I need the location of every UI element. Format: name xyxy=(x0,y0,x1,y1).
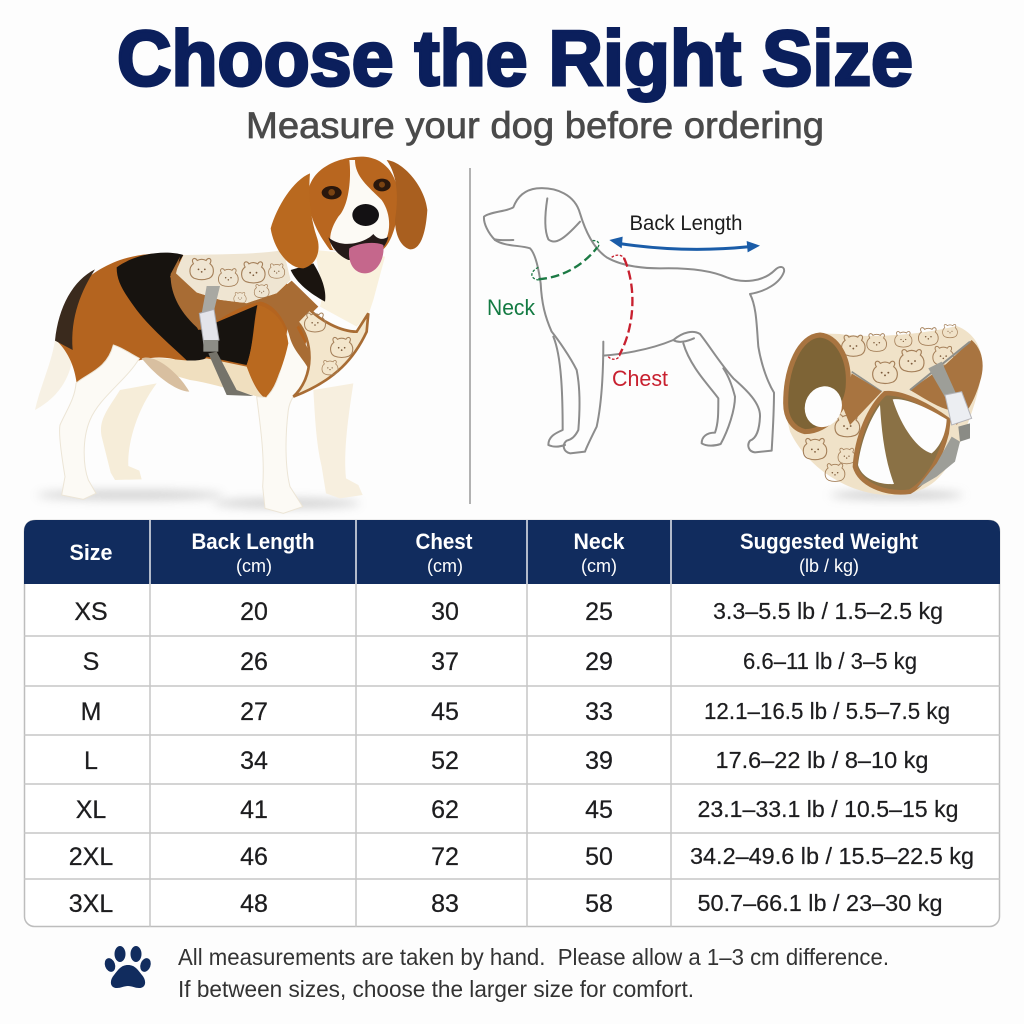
left opening xyxy=(786,335,848,432)
row 3XL: 50.7–66.1 lb / 23–30 kg xyxy=(698,890,942,916)
row S: S xyxy=(83,648,99,676)
row 3XL: 83 xyxy=(431,890,459,918)
row 3XL: 48 xyxy=(240,890,268,918)
harness brown flap xyxy=(171,257,318,382)
grey trim xyxy=(910,342,970,390)
row 2XL: 46 xyxy=(240,843,268,871)
row S: 26 xyxy=(240,648,268,676)
table header: Chest xyxy=(416,529,473,554)
row S: 6.6–11 lb / 3–5 kg xyxy=(743,648,917,674)
footnote: If between sizes, choose the larger size for comfort. xyxy=(178,976,694,1002)
size table xyxy=(24,520,1000,927)
eyes xyxy=(322,186,342,199)
harness back panel xyxy=(171,250,318,382)
table header: (cm) xyxy=(581,556,617,576)
table header: Back Length xyxy=(192,529,314,554)
row 3XL xyxy=(69,890,942,918)
back length arrow xyxy=(609,237,760,252)
grey strap and buckle xyxy=(199,286,253,396)
belly xyxy=(143,358,265,398)
ear right xyxy=(387,160,427,249)
row M xyxy=(81,698,950,726)
photo: beagle wearing harness xyxy=(35,157,427,513)
row L: 17.6–22 lb / 8–10 kg xyxy=(716,747,928,773)
row M: M xyxy=(81,698,101,726)
row L: L xyxy=(84,747,98,775)
row 3XL: 58 xyxy=(585,890,613,918)
black saddle xyxy=(117,253,257,368)
row L: 39 xyxy=(585,747,613,775)
chest white xyxy=(315,250,385,327)
label: back length: Back Length xyxy=(630,212,742,235)
diagram: dog outline with measurement lines xyxy=(484,188,784,453)
rump shading xyxy=(55,269,95,350)
right suede panel xyxy=(910,340,983,425)
dog outline xyxy=(484,188,784,453)
chest measure xyxy=(608,255,632,359)
row M: 27 xyxy=(240,698,268,726)
label: neck: Neck xyxy=(487,295,536,320)
footnote xyxy=(178,944,889,1002)
table header: Size xyxy=(70,540,112,565)
body xyxy=(56,253,313,398)
row XS xyxy=(74,598,943,626)
row XL: XL xyxy=(76,796,106,824)
tongue xyxy=(349,243,384,273)
label: chest: Chest xyxy=(612,366,668,391)
row 2XL: 50 xyxy=(585,843,613,871)
icon: paw print xyxy=(103,946,153,988)
row L: 34 xyxy=(240,747,268,775)
mouth xyxy=(328,234,388,260)
row M: 12.1–16.5 lb / 5.5–7.5 kg xyxy=(704,698,950,724)
neck measure xyxy=(532,241,599,280)
row 3XL: 3XL xyxy=(69,890,113,918)
row 2XL xyxy=(69,843,974,871)
row XL: 23.1–33.1 lb / 10.5–15 kg xyxy=(698,796,958,822)
row XS: 25 xyxy=(585,598,613,626)
centre suede band xyxy=(843,373,882,425)
table header: Neck xyxy=(574,529,625,554)
row S: 37 xyxy=(431,648,459,676)
row 2XL: 2XL xyxy=(69,843,113,871)
harness chest panel xyxy=(293,309,368,397)
row XS: XS xyxy=(74,598,108,626)
row L: 52 xyxy=(431,747,459,775)
ear left xyxy=(271,173,319,268)
table header: (cm) xyxy=(427,556,463,576)
tail xyxy=(35,340,73,410)
right openings xyxy=(855,393,948,492)
row M: 45 xyxy=(431,698,459,726)
row XL: 62 xyxy=(431,796,459,824)
head xyxy=(271,157,427,273)
row XL xyxy=(76,796,958,824)
shoulder xyxy=(247,305,288,397)
photo: harness product xyxy=(783,324,983,499)
row XL: 41 xyxy=(240,796,268,824)
row 2XL: 72 xyxy=(431,843,459,871)
blaze and muzzle xyxy=(330,160,389,250)
strap and buckle xyxy=(928,362,957,400)
row M: 33 xyxy=(585,698,613,726)
table header: (cm) xyxy=(236,556,272,576)
nose xyxy=(352,204,379,226)
black neck patch xyxy=(291,263,325,302)
row S xyxy=(83,648,917,676)
divider xyxy=(469,168,471,504)
table header xyxy=(24,520,1000,584)
row S: 29 xyxy=(585,648,613,676)
near front leg and chest xyxy=(257,330,313,513)
row XS: 30 xyxy=(431,598,459,626)
bear prints xyxy=(803,324,957,481)
row 2XL: 34.2–49.6 lb / 15.5–22.5 kg xyxy=(690,843,974,869)
flank tuck xyxy=(142,357,189,392)
table frame xyxy=(24,520,1000,926)
harness body xyxy=(783,326,982,495)
subtitle: Measure your dog before ordering xyxy=(246,105,824,146)
table header: (lb / kg) xyxy=(799,556,859,576)
title: Choose the Right Size xyxy=(117,14,913,102)
row L xyxy=(84,747,928,775)
row XS: 20 xyxy=(240,598,268,626)
footnote: All measurements are taken by hand. Please allow a 1–3 cm difference. xyxy=(178,944,889,970)
row XS: 3.3–5.5 lb / 1.5–2.5 kg xyxy=(713,598,943,624)
far legs xyxy=(101,383,157,480)
row XL: 45 xyxy=(585,796,613,824)
near hind leg xyxy=(60,345,139,499)
table header: Suggested Weight xyxy=(740,529,919,554)
